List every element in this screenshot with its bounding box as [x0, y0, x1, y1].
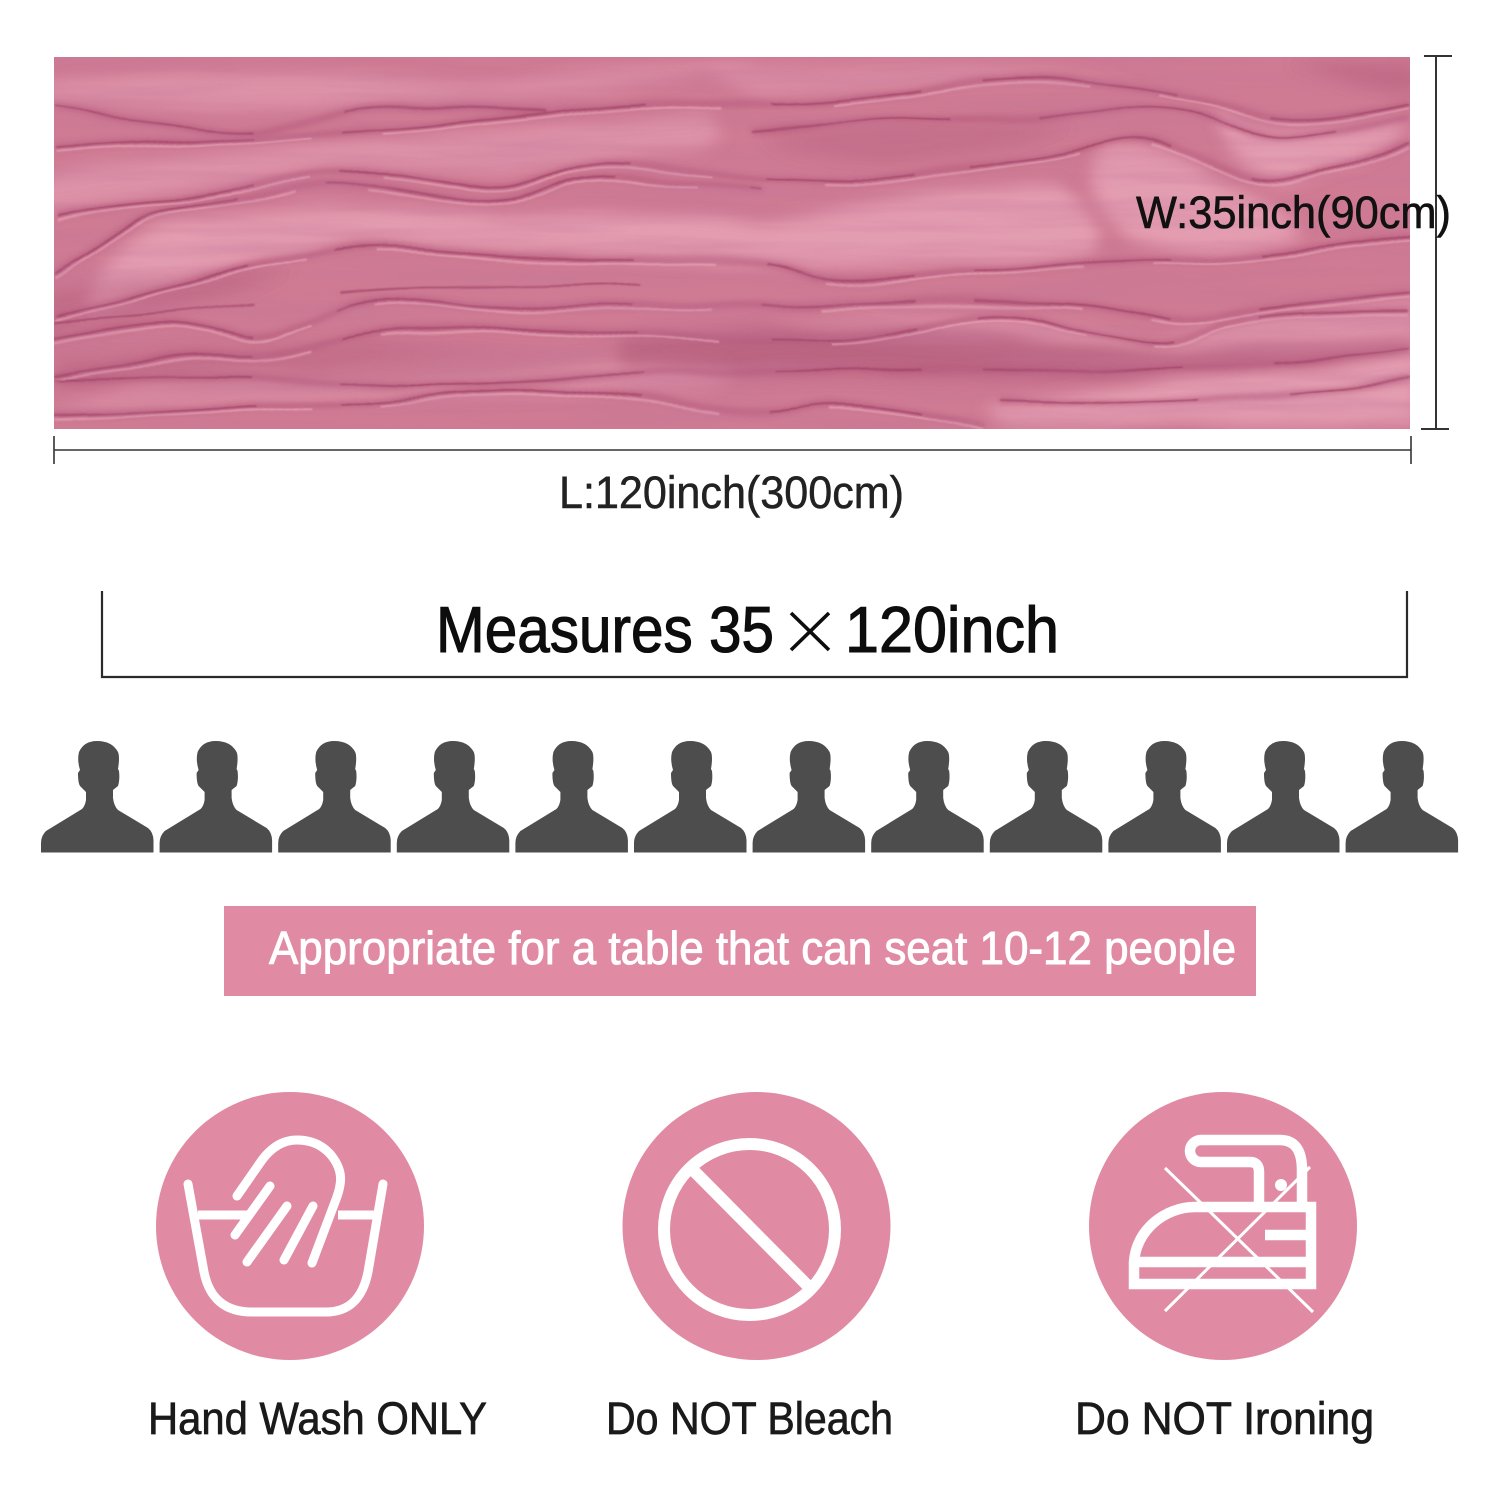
bright fold highlights	[54, 83, 1410, 431]
width dimension line	[1421, 56, 1452, 429]
icon: hand wash	[156, 1092, 424, 1360]
care label: ironing: Do NOT Ironing	[1075, 1393, 1374, 1444]
heading: measures: Measures 35	[436, 593, 774, 666]
length dimension line	[54, 436, 1411, 464]
care label: hand wash: Hand Wash ONLY	[148, 1393, 487, 1444]
seating banner: Appropriate for a table that can seat 10-12 people	[269, 922, 1236, 974]
heading: measures: 120inch	[845, 593, 1059, 666]
soft ridges	[54, 79, 1410, 427]
icon: do not bleach	[622, 1092, 890, 1360]
width label: W:35inch(90cm)	[1136, 187, 1451, 238]
people row: twelve busts	[41, 741, 1458, 852]
heading: measures	[436, 593, 1059, 666]
dark crease lines	[54, 79, 1410, 427]
light sheer bands	[40, 62, 1420, 425]
deep shadow bands	[40, 62, 1420, 388]
seating banner	[224, 906, 1256, 996]
icon: do not iron	[1089, 1092, 1357, 1360]
measure bracket	[102, 591, 1407, 677]
care label: bleach: Do NOT Bleach	[606, 1393, 893, 1444]
fabric photo panel	[40, 57, 1420, 431]
length label: L:120inch(300cm)	[559, 467, 904, 518]
